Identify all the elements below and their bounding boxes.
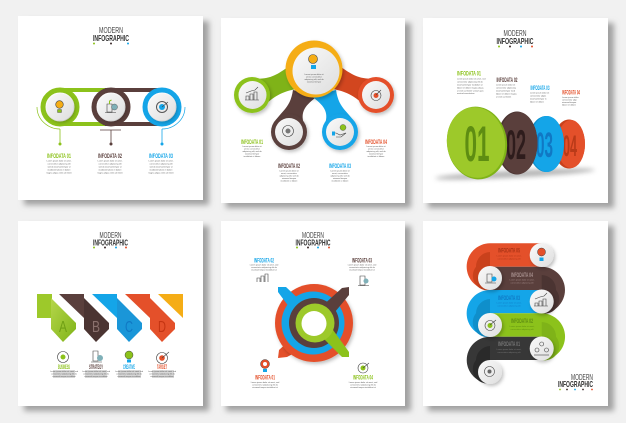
label: infodata 01: INFODATA 01: [457, 72, 481, 78]
title: [558, 372, 593, 390]
ring: blue with arrow: [278, 287, 344, 354]
label: infodata 01: adipiscing elit, sed do: [242, 150, 262, 153]
label: infodata 03: eiusmod tempor: [333, 177, 348, 180]
connector: blue: [311, 90, 356, 125]
label: infodata 03: [530, 86, 550, 104]
title: INFOGRAPHIC: [93, 238, 128, 248]
label: infodata 01: [241, 140, 263, 158]
label: infodata 02: incididunt labore et dolore: [99, 168, 122, 172]
hub: yellow circle: Lorem ipsum dolor sit: [304, 73, 324, 76]
column: strategy: STRATEGY: [89, 365, 103, 371]
floor shadow: [435, 166, 595, 182]
disc 04: [553, 120, 585, 168]
label: infodata 01: eiusmod tempor incididunt ut: [252, 386, 278, 389]
label: infodata 02: [97, 154, 123, 174]
label: infodata 03: Lorem ipsum dolor sit: [330, 170, 350, 172]
node: blue circle with target icon: [145, 90, 179, 124]
linked bands: [43, 90, 162, 124]
connector: brown: [273, 90, 318, 125]
band 01: dark: [467, 337, 542, 384]
ribbon: red: [125, 294, 175, 342]
band 02: green: consectetur adipiscing elit: [511, 328, 534, 331]
label: infodata 01: INFODATA 01: [255, 376, 275, 382]
label: infodata 01: [46, 154, 72, 174]
label: infodata 03: [148, 154, 174, 174]
ring: green with handle: [296, 304, 349, 357]
label: infodata 01: magna aliqua enim ad minim: [46, 172, 72, 174]
label: infodata 02: eiusmod tempor incid: [496, 90, 515, 92]
title: MODERN: [99, 25, 123, 35]
label: infodata 03: labore et dolore: [530, 100, 545, 104]
title: MODERN: [571, 372, 593, 382]
band 04: brown: Lorem ipsum dolor sit amet,: [510, 278, 535, 282]
leaders: [58, 129, 164, 146]
column: creative: [115, 351, 143, 378]
label: infodata 03: [329, 164, 351, 182]
label: infodata 02: Lorem ipsum dolor sit amet, sed: [250, 264, 278, 266]
band 03: blue: INFODATA 03: [498, 296, 520, 302]
column: strategy: eiusmod tempor incididunt: [84, 375, 108, 378]
label: infodata 01: nostrud exercitation: [457, 92, 474, 95]
band 01: dark: consectetur adipiscing elit: [498, 351, 521, 354]
label: infodata 04: adipiscing elit, sed do: [366, 150, 386, 153]
label: infodata 02: eiusmod tempor: [282, 177, 297, 180]
label: infodata 01: INFODATA 01: [47, 154, 71, 160]
icon: bulb: [530, 243, 554, 267]
icon: head: [478, 360, 502, 384]
column: creative: Lorem ipsum dolor sit amet sed: [115, 370, 143, 373]
ribbon: blue: C: [125, 319, 133, 336]
column: target: [148, 352, 176, 378]
label: infodata 02: adipiscing elit, sed do: [279, 174, 299, 178]
label: infodata 04: eiusmod tempor: [562, 101, 577, 104]
label: infodata 01: amet, consectetur: [244, 148, 260, 150]
column: strategy: consectetur adipiscing elit do: [83, 372, 110, 376]
title: MODERN: [302, 230, 324, 240]
label: infodata 02: consectetur adipiscing elit do: [251, 266, 278, 269]
column: target: consectetur adipiscing elit do: [149, 372, 176, 376]
panel: hub and spoke: [221, 18, 405, 203]
hub: yellow circle: amet, consectetur: [306, 76, 322, 78]
disc 03: 03: [536, 126, 553, 165]
panel: numbered discs: [423, 18, 608, 203]
label: infodata 03: Lorem ipsum dolor sit amet, sed: [348, 264, 376, 266]
label: infodata 01: Lorem ipsum dolor sit: [242, 145, 262, 148]
label: infodata 01: eiusmod tempor incididunt ut: [457, 84, 483, 86]
side arcs: [37, 107, 185, 129]
title: MODERN: [504, 28, 526, 38]
label: infodata 04: consectetur adip: [562, 98, 578, 102]
label: infodata 01: incididunt ut labore: [244, 155, 261, 158]
band 04: brown: consectetur adipiscing elit: [511, 282, 534, 284]
label: infodata 02: ut enim ad minim: [496, 96, 512, 98]
label: infodata 01: Lorem ipsum dolor sit amet, sed: [457, 78, 485, 80]
label: infodata 04: eiusmod tempor: [369, 152, 384, 156]
hub: yellow circle: eiusmod tempor: [307, 80, 322, 84]
band 05: red: Lorem ipsum dolor sit amet,: [497, 254, 522, 258]
title: [496, 28, 534, 48]
label: infodata 02: amet, consectetur: [281, 172, 297, 175]
label: infodata 01: Lorem ipsum dolor sit amet, sed: [251, 381, 279, 384]
column: creative: CREATIVE: [123, 365, 135, 371]
band 05: red: INFODATA 05: [498, 248, 520, 254]
label: infodata 03: consectetur adipis: [530, 94, 546, 98]
label: infodata 01: [251, 360, 279, 389]
band 02: green: [490, 313, 565, 360]
icon: target: [478, 313, 502, 337]
title: INFOGRAPHIC: [496, 36, 534, 46]
disc 01: 01: [464, 116, 490, 172]
label: infodata 04: Lorem ipsum dolor: [562, 97, 579, 99]
label: infodata 02: [496, 78, 518, 98]
label: infodata 01: sed do eiusmod tempor ut: [47, 166, 71, 168]
label: infodata 03: INFODATA 03: [352, 258, 372, 264]
band 03: blue: [467, 290, 542, 337]
title: [93, 25, 129, 44]
ribbon: red: D: [158, 319, 166, 336]
label: infodata 01: Lorem ipsum dolor sit amet,: [47, 160, 72, 162]
node: brown circle with plant icon: [94, 90, 128, 124]
ribbon: yellow end: [158, 294, 183, 318]
band 05: red: [467, 243, 542, 290]
band 02: green: INFODATA 02: [511, 319, 533, 325]
label: infodata 03: adipiscing elit, sed do: [330, 174, 350, 178]
label: infodata 03: sed do eiusmod tempor ut: [149, 166, 173, 168]
label: infodata 03: incididunt ut labore: [332, 180, 349, 182]
hub: yellow circle: adipiscing elit, sed do: [304, 78, 324, 81]
label: infodata 03: INFODATA 03: [530, 86, 550, 92]
ring: brown with arrow: [289, 287, 349, 348]
label: infodata 01: INFODATA 01: [241, 140, 263, 146]
label: infodata 03: incididunt labore et dolore: [150, 168, 173, 172]
label: infodata 01: ut enim ad minim veniam quis: [457, 90, 483, 92]
label: infodata 02: consectetur adipiscing elit: [99, 162, 122, 166]
title: MODERN: [100, 230, 122, 240]
label: infodata 02: Lorem ipsum dolor sit amet,: [98, 160, 123, 162]
label: infodata 02: magna aliqua enim ad minim: [97, 172, 123, 174]
band 03: blue: Lorem ipsum dolor sit amet,: [497, 302, 522, 304]
column: strategy: [82, 351, 110, 378]
label: infodata 01: consectetur adipiscing elit do: [457, 80, 484, 84]
panel: folded ribbon: [18, 221, 203, 406]
disc 03: [528, 116, 564, 172]
column: business: BUSINESS: [58, 365, 70, 371]
band 03: blue: consectetur adipiscing elit: [498, 304, 521, 308]
label: infodata 03: amet, consectetur: [332, 172, 348, 175]
label: infodata 01: consectetur adipiscing elit do: [252, 384, 279, 386]
label: infodata 02: eiusmod tempor incididunt ut: [251, 268, 277, 272]
ribbon: green: [37, 294, 76, 342]
label: infodata 02: consectetur adipiscing: [496, 86, 516, 90]
label: infodata 03: eiusmod tempor incididunt ut: [349, 268, 375, 272]
column: business: consectetur adipiscing elit do: [51, 372, 78, 376]
label: infodata 03: consectetur adipiscing elit: [150, 162, 173, 166]
panel: three linked circles: [18, 16, 203, 200]
label: infodata 04: labore et dolore: [562, 104, 577, 106]
label: infodata 04: INFODATA 04: [365, 140, 387, 146]
title: INFOGRAPHIC: [296, 238, 330, 248]
label: infodata 04: eiusmod tempor incididunt ut: [350, 386, 376, 389]
connector: green: [252, 67, 297, 106]
label: infodata 04: INFODATA 04: [353, 376, 373, 382]
node: red target: [358, 77, 394, 113]
ribbon: brown: B: [92, 319, 100, 336]
label: infodata 02: incididunt ut labore: [281, 180, 298, 182]
label: infodata 04: consectetur adipiscing elit do: [350, 384, 377, 386]
band 04: brown: [490, 267, 565, 314]
ring: red with arrow: [275, 284, 353, 362]
column: target: TARGET: [157, 365, 167, 371]
label: infodata 02: INFODATA 02: [98, 154, 122, 160]
connector: red: [332, 67, 377, 106]
icon: team: [530, 336, 554, 360]
column: creative: eiusmod tempor incididunt: [117, 375, 141, 378]
ribbon: green: A: [59, 319, 67, 336]
label: infodata 04: amet, consectetur: [368, 148, 384, 150]
label: infodata 01: eiusmod tempor: [245, 152, 260, 156]
panel: numbered discs: INFODATA 04: [562, 90, 580, 96]
column: creative: consectetur adipiscing elit do: [116, 372, 143, 376]
label: infodata 03: eiusmod tempor in: [530, 98, 546, 100]
label: infodata 03: INFODATA 03: [329, 164, 351, 170]
hub: yellow circle: [286, 40, 342, 98]
label: infodata 01: labore et dolore magna aliqua: [457, 86, 484, 90]
label: infodata 02: [278, 164, 300, 182]
label: infodata 02: Lorem ipsum dolor sit: [279, 170, 299, 172]
label: infodata 03: Lorem ipsum dolor sit amet,: [149, 160, 174, 162]
panel: serpentine steps: [423, 221, 608, 406]
title: [296, 230, 330, 248]
band 04: brown: INFODATA 04: [511, 273, 533, 279]
label: infodata 04: [365, 140, 387, 158]
label: infodata 04: [349, 363, 377, 389]
title: [93, 230, 128, 248]
label: infodata 04: Lorem ipsum dolor sit: [366, 145, 386, 148]
title: INFOGRAPHIC: [558, 379, 593, 389]
band 01: dark: Lorem ipsum dolor sit amet,: [497, 348, 522, 351]
disc 04: 04: [563, 130, 577, 163]
node: brown head: [271, 114, 307, 150]
column: business: eiusmod tempor incididunt: [52, 375, 76, 378]
icon: rising chart: [530, 290, 554, 314]
disc 02: [496, 112, 538, 174]
label: infodata 02: sed do eiusmod tempor ut: [98, 166, 122, 168]
ribbon: blue: [92, 294, 142, 342]
node: green chart: [234, 77, 270, 113]
column: business: Lorem ipsum dolor sit amet sed: [50, 370, 78, 373]
label: infodata 04: incididunt ut labore: [368, 155, 385, 158]
label: infodata 01: [457, 72, 485, 95]
disc 02: 02: [506, 121, 526, 168]
label: infodata 03: INFODATA 03: [149, 154, 173, 160]
column: target: eiusmod tempor incididunt: [150, 375, 174, 378]
label: infodata 03: magna aliqua enim ad minim: [148, 172, 174, 174]
label: infodata 01: incididunt labore et dolore: [48, 168, 71, 172]
label: infodata 01: consectetur adipiscing elit: [48, 162, 71, 166]
column: target: Lorem ipsum dolor sit amet sed: [148, 370, 176, 373]
node: blue hand and coin: [322, 114, 358, 150]
band 02: green: Lorem ipsum dolor sit amet,: [510, 325, 535, 328]
panel: concentric rings: [221, 221, 405, 406]
label: infodata 02: INFODATA 02: [496, 78, 518, 84]
ribbon: brown: [59, 294, 109, 342]
label: infodata 04: Lorem ipsum dolor sit amet, sed: [349, 381, 377, 384]
label: infodata 03: Lorem ipsum dolor sit: [530, 92, 550, 94]
label: infodata 02: Lorem ipsum dolor sit: [496, 84, 516, 86]
label: infodata 02: INFODATA 02: [278, 164, 300, 170]
label: infodata 02: [250, 258, 278, 282]
band 05: red: consectetur adipiscing elit: [498, 258, 521, 260]
disc 01: [442, 103, 512, 183]
column: business: [50, 352, 78, 378]
band 01: dark: INFODATA 01: [498, 342, 520, 348]
label: infodata 02: INFODATA 02: [254, 258, 274, 264]
icon: plant and book: [478, 266, 502, 290]
column: strategy: Lorem ipsum dolor sit amet sed: [82, 370, 110, 373]
title: INFOGRAPHIC: [93, 33, 129, 43]
label: infodata 03: consectetur adipiscing elit do: [349, 266, 376, 269]
label: infodata 03: [348, 258, 376, 286]
label: infodata 04: [562, 90, 580, 106]
label: infodata 02: labore et dolore magna: [496, 92, 517, 96]
node: green circle with bulb icon: [43, 90, 77, 124]
